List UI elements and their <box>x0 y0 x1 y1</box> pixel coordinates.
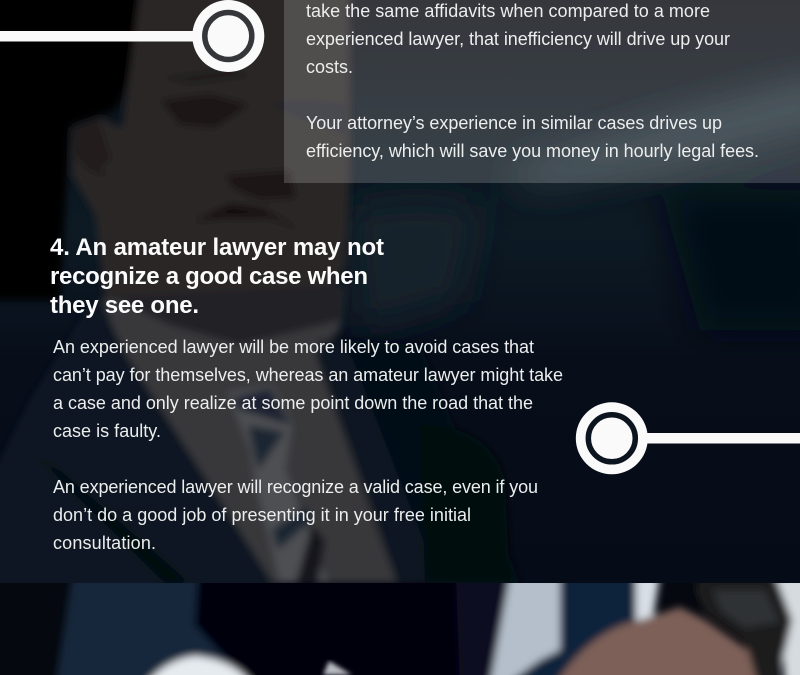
right lapel <box>318 340 425 583</box>
timeline marker: bottom <box>576 402 800 474</box>
ear <box>72 118 112 178</box>
body text: point 4 <box>53 337 563 553</box>
panel text: efficiency, which will save you money in hourly legal fees. <box>306 141 759 161</box>
heading: point 4 <box>50 234 384 319</box>
body text: point 4: can’t pay for themselves, whereas an amateur lawyer might take <box>53 365 563 385</box>
bottom photo: hand with pen and watch <box>0 575 800 675</box>
panel text <box>306 1 759 161</box>
body text: point 4: An experienced lawyer will be more likely to avoid cases that <box>53 337 534 357</box>
nose shadow <box>225 170 296 200</box>
eye shadows <box>164 94 244 128</box>
dark shape at lower centre <box>420 425 510 583</box>
body text: point 4: case is faulty. <box>53 421 161 441</box>
heading: point 4: 4. An amateur lawyer may not <box>50 234 384 261</box>
panel text: take the same affidavits when compared to a more <box>306 1 710 21</box>
body text: point 4: An experienced lawyer will recognize a valid case, even if you <box>53 477 538 497</box>
tie <box>228 385 328 583</box>
dark jacket <box>192 583 460 675</box>
translucent text panel <box>284 0 800 183</box>
heading: point 4: they see one. <box>50 292 199 319</box>
sleeve <box>54 583 242 675</box>
face <box>72 0 350 330</box>
pen <box>323 661 352 675</box>
navy jacket right <box>510 583 642 675</box>
panel text: costs. <box>306 57 353 77</box>
dark hair and left backdrop <box>0 0 150 300</box>
left suit <box>0 318 276 583</box>
hand <box>555 607 765 675</box>
body text: point 4: a case and only realize at some point down the road that the <box>53 393 533 413</box>
mouth <box>203 203 279 221</box>
shirt patches <box>490 575 560 675</box>
body text: point 4: don’t do a good job of presenting it in your free initial <box>53 505 471 525</box>
timeline marker: top <box>0 0 264 72</box>
watch <box>695 575 792 675</box>
body text: point 4: consultation. <box>53 533 156 553</box>
shirt <box>100 290 397 583</box>
panel text: Your attorney’s experience in similar cases drives up <box>306 113 722 133</box>
heading: point 4: recognize a good case when <box>50 263 368 290</box>
shirt cuff <box>145 656 252 675</box>
panel text: experienced lawyer, that inefficiency will drive up your <box>306 29 730 49</box>
